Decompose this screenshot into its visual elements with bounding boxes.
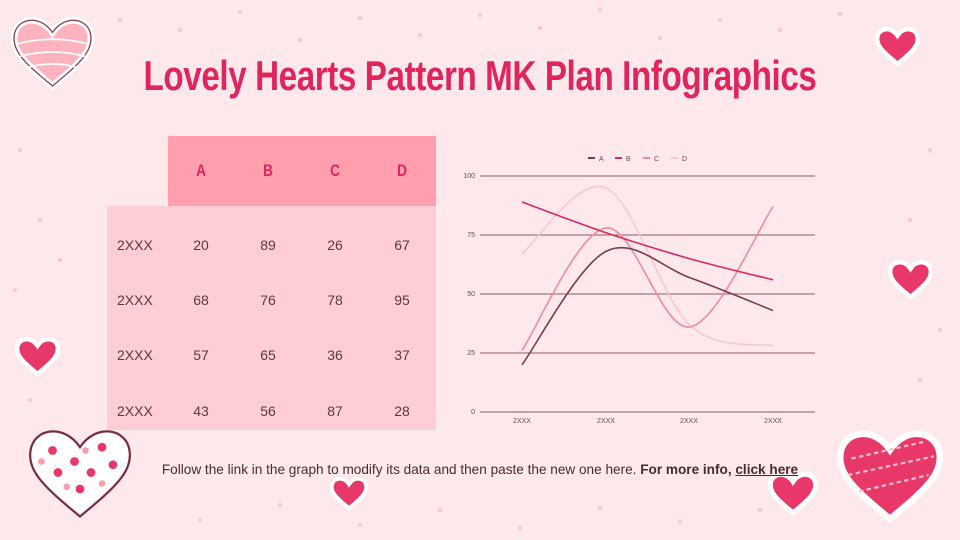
table: A: [196, 161, 206, 180]
table: 87: [327, 403, 343, 419]
table: 36: [327, 347, 343, 363]
line chart: 2XXX: [597, 418, 615, 425]
table: C: [330, 161, 340, 180]
table: 2XXX: [117, 237, 153, 253]
table: 2XXX: [117, 347, 153, 363]
table: 43: [193, 403, 209, 419]
line chart: 0: [471, 409, 475, 416]
table: 2XXX: [117, 292, 153, 308]
table: 20: [193, 237, 209, 253]
table: D: [397, 161, 407, 180]
table: 68: [193, 292, 209, 308]
icon: heart bottom right small: [768, 472, 818, 516]
table: 67: [394, 237, 410, 253]
icon: striped heart top-left: [10, 16, 94, 90]
table: 95: [394, 292, 410, 308]
line chart: 2XXX: [680, 418, 698, 425]
footer text: Follow the link in the graph to modify its data and then paste the new one here. For more info, click here: [162, 462, 798, 477]
line chart: C: [654, 156, 659, 163]
line chart: D: [682, 156, 687, 163]
table: 2XXX: [117, 403, 153, 419]
table: 76: [260, 292, 276, 308]
line chart: 100: [463, 173, 475, 180]
icon: heart right: [888, 260, 933, 300]
line chart: 2XXX: [513, 418, 531, 425]
table: B: [263, 161, 273, 180]
table: [107, 136, 436, 430]
icon: heart left: [15, 337, 60, 376]
line chart: 2XXX: [764, 418, 782, 425]
table: 37: [394, 347, 410, 363]
table header row: [168, 136, 436, 206]
table: 28: [394, 403, 410, 419]
line chart: A: [599, 156, 604, 163]
table: 65: [260, 347, 276, 363]
icon: heart bottom center: [330, 477, 368, 510]
title: Lovely Hearts Pattern MK Plan Infographics: [144, 52, 816, 99]
icon: heart top-right: [875, 27, 920, 66]
line chart: B: [626, 156, 631, 163]
icon: striped heart bottom right: [837, 430, 943, 523]
line chart: 25: [467, 350, 475, 357]
icon: dotted heart bottom-left: [29, 430, 131, 518]
table: 26: [327, 237, 343, 253]
table: 57: [193, 347, 209, 363]
table: 56: [260, 403, 276, 419]
table: 89: [260, 237, 276, 253]
line chart: 75: [467, 232, 475, 239]
line chart: [463, 156, 815, 425]
line chart: 50: [467, 291, 475, 298]
table: 78: [327, 292, 343, 308]
